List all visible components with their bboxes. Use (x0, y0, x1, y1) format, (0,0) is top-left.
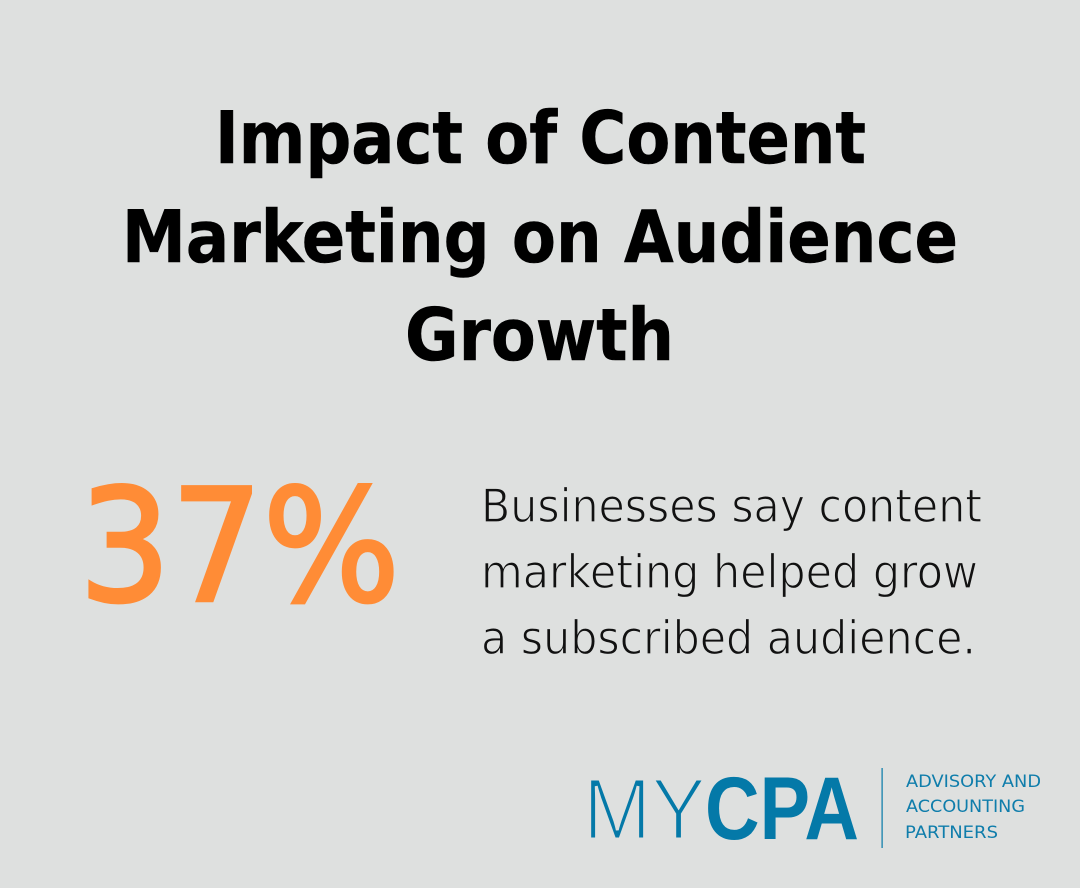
description text: marketing helped grow (481, 545, 978, 599)
logo wordmark (583, 758, 859, 858)
description text (481, 479, 982, 665)
statistic: 37%: 37% (79, 456, 400, 638)
logo tagline: ACCOUNTING (906, 797, 1025, 816)
title: Marketing on Audience (122, 195, 958, 279)
logo: MYCPA advisory and accounting partners (583, 758, 1041, 858)
title (122, 96, 958, 377)
logo wordmark: MY (583, 761, 706, 858)
logo tagline (905, 772, 1041, 842)
title: Impact of Content (215, 96, 866, 180)
logo tagline: PARTNERS (905, 823, 998, 842)
logo divider (882, 768, 883, 848)
logo tagline: ADVISORY AND (906, 772, 1041, 791)
description text: a subscribed audience. (481, 611, 976, 665)
description text: Businesses say content (481, 479, 982, 533)
logo wordmark: CPA (705, 758, 859, 858)
title: Growth (405, 293, 674, 377)
